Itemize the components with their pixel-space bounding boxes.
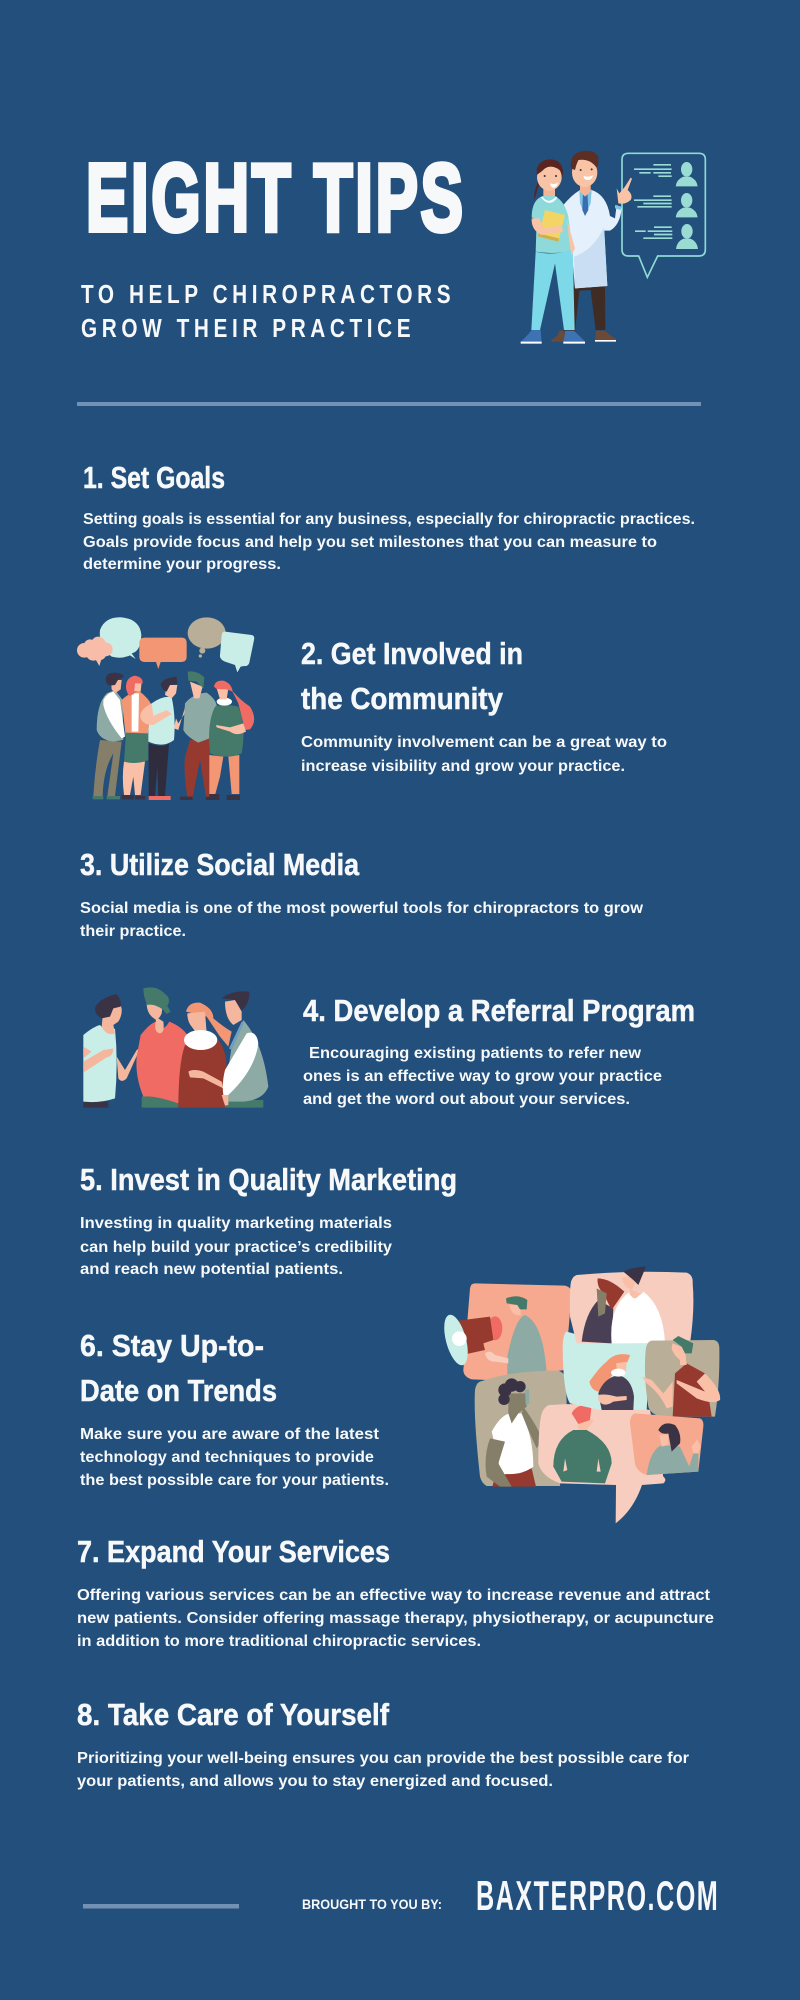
body text: your patients, and allows you to stay energized and focused. [77, 1773, 553, 1790]
footer [83, 1874, 718, 1920]
body text: new patients. Consider offering massage therapy, physiotherapy, or acupuncture [77, 1610, 714, 1627]
person: woman in orange jacket [122, 676, 152, 799]
person: man in mint shirt [140, 677, 197, 800]
body text: Offering various services can be an effective way to increase revenue and attract [77, 1587, 711, 1604]
body text: Prioritizing your well-being ensures you can provide the best possible care for [77, 1750, 689, 1767]
body text: determine your progress. [83, 556, 281, 573]
illustration: collage of people in speech bubbles [440, 1267, 720, 1523]
heading: Date on Trends [80, 1373, 277, 1408]
body text: increase visibility and grow your practice. [301, 758, 625, 775]
person: green-haired man in coral shirt [136, 987, 187, 1108]
bubble: woman waving [630, 1413, 703, 1475]
tip 4: develop a referral program [303, 993, 695, 1108]
tip 8: take care of yourself [77, 1697, 689, 1790]
body text: Social media is one of the most powerful tools for chiropractors to grow [80, 900, 644, 917]
body text: in addition to more traditional chiropractic services. [77, 1633, 481, 1650]
subtitle: TO HELP CHIROPRACTORS [81, 280, 451, 309]
tip 7: expand your services [77, 1534, 714, 1650]
heading: 2. Get Involved in [301, 636, 523, 671]
tip 6: stay up-to-date on trends [80, 1328, 389, 1489]
heading [80, 1328, 277, 1408]
illustration: doctor and nurse with patient list [521, 151, 705, 344]
body text: Encouraging existing patients to refer new [309, 1045, 642, 1062]
body text: the best possible care for your patients. [80, 1472, 389, 1489]
body text [80, 900, 644, 940]
attribution label: BROUGHT TO YOU BY: [302, 1896, 442, 1912]
bubble: man in red shirt [642, 1336, 720, 1417]
person: man in mint shirt [83, 994, 153, 1108]
heading: 5. Invest in Quality Marketing [80, 1162, 457, 1197]
body text [80, 1426, 389, 1489]
subtitle: GROW THEIR PRACTICE [81, 314, 411, 343]
heading: the Community [301, 681, 504, 716]
person: man in vest [93, 673, 125, 799]
bubble: woman on phone [475, 1371, 567, 1487]
title: EIGHT TIPS [86, 144, 463, 252]
body text [77, 1750, 689, 1790]
speech bubbles [77, 617, 254, 672]
bubble: man with megaphone [440, 1283, 572, 1380]
body text [77, 1587, 714, 1650]
person: man with green hair [180, 671, 217, 800]
person: woman in red dress [178, 1003, 232, 1108]
body text [80, 1215, 392, 1278]
body text: their practice. [80, 923, 186, 940]
tip 2: get involved in the community [301, 636, 667, 775]
heading: 6. Stay Up-to- [80, 1328, 264, 1363]
doctor [551, 151, 632, 342]
bubble: two women top right [570, 1267, 693, 1343]
body text: and reach new potential patients. [80, 1261, 343, 1278]
body text [303, 1045, 662, 1108]
bubble: person in green sweater [538, 1404, 665, 1523]
divider [77, 402, 701, 406]
body text [83, 511, 695, 573]
body text: Goals provide focus and help you set milestones that you can measure to [83, 534, 657, 551]
body text: technology and techniques to provide [80, 1449, 374, 1466]
tip 5: invest in quality marketing [80, 1162, 457, 1278]
body text [301, 734, 667, 775]
illustration: group conversation with speech bubbles [77, 617, 254, 800]
body text: can help build your practice’s credibility [80, 1239, 392, 1256]
body text: Make sure you are aware of the latest [80, 1426, 380, 1443]
heading: 8. Take Care of Yourself [77, 1697, 390, 1732]
body text: Community involvement can be a great way to [301, 734, 667, 751]
body text: ones is an effective way to grow your practice [303, 1068, 662, 1085]
heading: 4. Develop a Referral Program [303, 993, 695, 1028]
heading: 7. Expand Your Services [77, 1534, 390, 1569]
heading [301, 636, 523, 716]
nurse [521, 159, 585, 344]
illustration: four people talking [83, 987, 268, 1108]
bubble: woman in mint panel [563, 1332, 650, 1410]
tip 3: utilize social media [80, 847, 644, 940]
subtitle [81, 280, 451, 343]
person: woman with long red hair [209, 681, 254, 800]
body text: Investing in quality marketing materials [80, 1215, 392, 1232]
body text: and get the word out about your services. [303, 1091, 630, 1108]
icon: speech bubble with patient records [622, 153, 705, 277]
heading: 1. Set Goals [83, 460, 225, 495]
tip 1: set goals [83, 460, 695, 573]
person: man in vest [222, 991, 268, 1108]
body text: Setting goals is essential for any business, especially for chiropractic practices. [83, 511, 695, 528]
heading: 3. Utilize Social Media [80, 847, 360, 882]
website: BAXTERPRO.COM [476, 1874, 718, 1920]
